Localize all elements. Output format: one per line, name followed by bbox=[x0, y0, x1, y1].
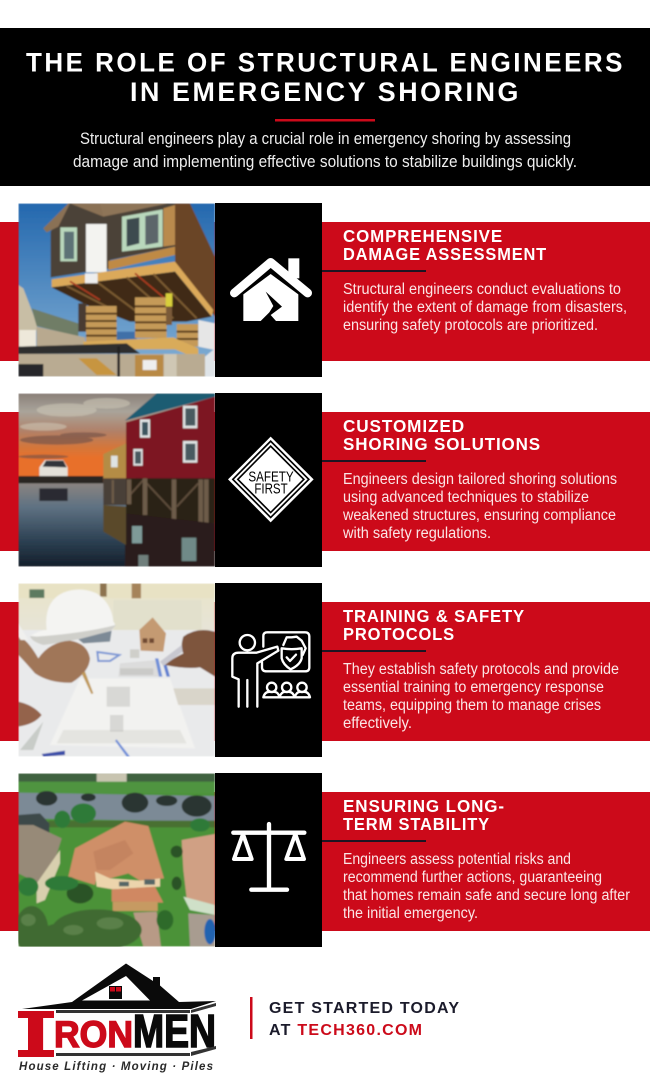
cta text: AT TECH360.COM bbox=[269, 1022, 422, 1039]
icon: balance scale bbox=[233, 824, 304, 890]
body text: recommend further actions, guaranteeing bbox=[343, 869, 602, 886]
call to action bbox=[250, 997, 459, 1039]
connector line bbox=[322, 650, 426, 652]
body text bbox=[342, 471, 617, 542]
photo: engineers reviewing blueprints bbox=[18, 583, 215, 757]
title: IN EMERGENCY SHORING bbox=[130, 77, 521, 107]
logo: Ironmen bbox=[18, 964, 216, 1073]
title bbox=[26, 48, 625, 107]
heading: SHORING SOLUTIONS bbox=[343, 434, 541, 454]
icon: damaged house bbox=[234, 258, 308, 321]
panel: training and safety protocols bbox=[0, 583, 650, 757]
icon panel: black column bbox=[215, 773, 322, 947]
cta text bbox=[269, 1000, 459, 1039]
sign text: FIRST bbox=[254, 481, 288, 498]
body text bbox=[343, 851, 630, 922]
intro text: damage and implementing effective solutions to stabilize buildings quickly. bbox=[73, 153, 577, 171]
panel: comprehensive damage assessment bbox=[0, 203, 650, 377]
body text: the initial emergency. bbox=[343, 905, 478, 922]
title: THE ROLE OF STRUCTURAL ENGINEERS bbox=[26, 48, 625, 78]
body text: identify the extent of damage from disasters, bbox=[343, 299, 627, 316]
logo wordmark: MEN bbox=[133, 1005, 216, 1057]
body text bbox=[343, 281, 627, 334]
panel: ensuring long-term stability bbox=[0, 773, 650, 954]
heading bbox=[343, 606, 525, 644]
heading bbox=[343, 226, 547, 264]
heading: ENSURING LONG- bbox=[343, 796, 505, 816]
title banner bbox=[0, 28, 650, 186]
connector line bbox=[322, 460, 426, 462]
body text: essential training to emergency response bbox=[343, 679, 604, 696]
icon: safety first sign bbox=[228, 437, 314, 522]
body text: ensuring safety protocols are prioritized. bbox=[343, 317, 598, 334]
body text: They establish safety protocols and provide bbox=[343, 661, 619, 678]
sign text bbox=[248, 469, 294, 498]
body text: teams, equipping them to manage crises bbox=[343, 697, 601, 714]
heading: TERM STABILITY bbox=[343, 814, 490, 834]
connector line bbox=[322, 270, 426, 272]
body text: using advanced techniques to stabilize bbox=[343, 489, 589, 506]
logo wordmark: I bbox=[18, 999, 54, 1072]
body text: with safety regulations. bbox=[342, 525, 491, 542]
icon panel: black column bbox=[215, 203, 322, 377]
body text: weakened structures, ensuring compliance bbox=[342, 507, 616, 524]
heading: TRAINING & SAFETY bbox=[343, 606, 525, 626]
icon panel: black column bbox=[215, 583, 322, 757]
heading: DAMAGE ASSESSMENT bbox=[343, 244, 547, 264]
panel: customized shoring solutions bbox=[0, 393, 650, 567]
photo: lifted house on cribbing bbox=[18, 203, 215, 377]
logo wordmark: RON bbox=[54, 1014, 133, 1055]
sign text: SAFETY bbox=[248, 469, 294, 486]
logo roof bbox=[22, 964, 216, 1013]
logo tagline: House Lifting · Moving · Piles bbox=[19, 1061, 213, 1073]
photo: stilt houses at sunset bbox=[18, 393, 215, 567]
heading: COMPREHENSIVE bbox=[343, 226, 503, 246]
heading: PROTOCOLS bbox=[343, 624, 455, 644]
icon panel: black column bbox=[215, 393, 322, 567]
body text: that homes remain safe and secure long after bbox=[343, 887, 630, 904]
body text bbox=[343, 661, 619, 732]
heading bbox=[343, 796, 505, 834]
body text: Structural engineers conduct evaluations to bbox=[343, 281, 621, 298]
heading bbox=[343, 416, 541, 454]
title underline bbox=[275, 119, 375, 122]
heading: CUSTOMIZED bbox=[343, 416, 465, 436]
icon: instructor at board bbox=[232, 632, 310, 707]
intro text bbox=[73, 130, 577, 171]
body text: Engineers design tailored shoring solutions bbox=[343, 471, 617, 488]
body text: effectively. bbox=[343, 715, 412, 732]
intro text: Structural engineers play a crucial role in emergency shoring by assessing bbox=[80, 130, 571, 148]
logo wordmark bbox=[18, 999, 216, 1072]
cta text: GET STARTED TODAY bbox=[269, 1000, 459, 1017]
connector line bbox=[322, 840, 426, 842]
body text: Engineers assess potential risks and bbox=[343, 851, 571, 868]
photo: aerial view of home bbox=[15, 773, 216, 954]
